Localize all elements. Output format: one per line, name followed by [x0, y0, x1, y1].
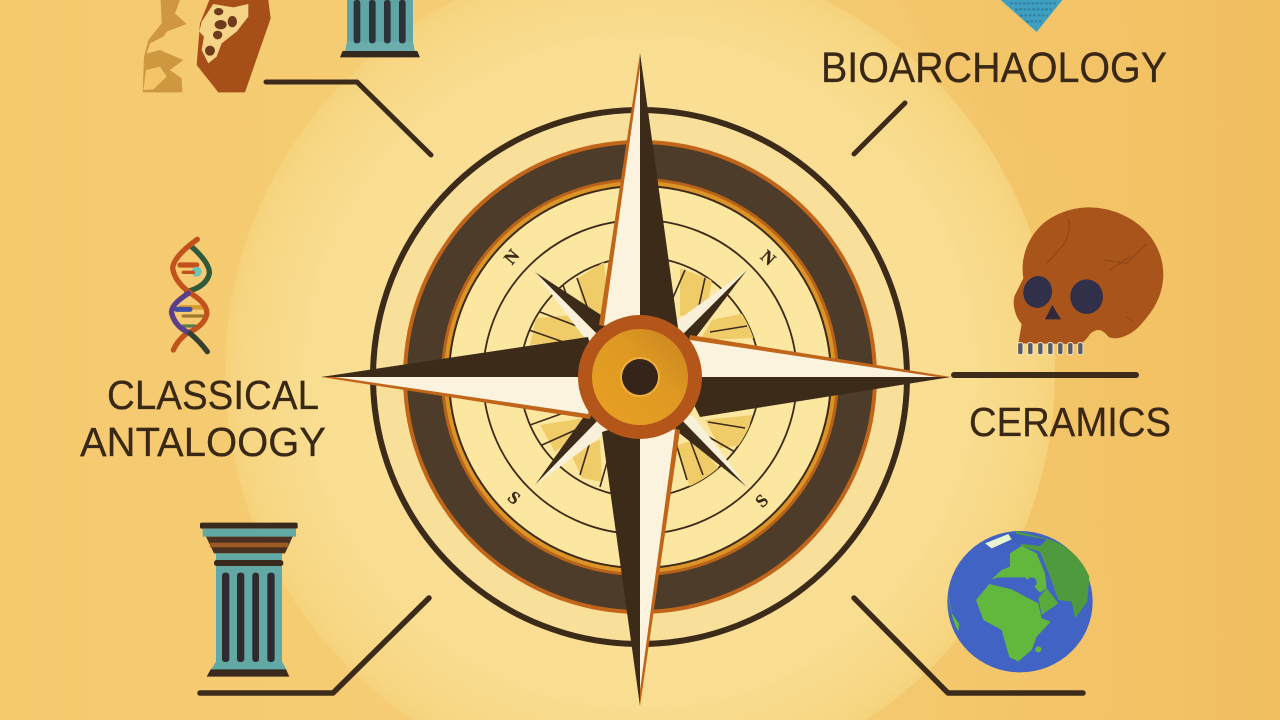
inner dial rings [483, 220, 797, 534]
icon: skull [1014, 207, 1163, 355]
east point [680, 335, 951, 417]
compass letters: N [757, 246, 780, 269]
icon: blue artifact [1001, 0, 1062, 32]
south point [602, 420, 680, 706]
compass hub [578, 315, 702, 439]
compass letters: S [751, 490, 772, 511]
icon: globe [947, 531, 1093, 672]
compass letters [500, 245, 780, 511]
outer compass ring [373, 110, 907, 644]
diagonal star points [535, 270, 747, 487]
dark compass band [403, 140, 877, 614]
rose spokes [529, 270, 747, 487]
icon: column bottom [200, 523, 298, 677]
compass [321, 53, 951, 706]
north point [599, 53, 678, 335]
compass letters: N [500, 245, 523, 268]
heading: classical antaloogy [80, 372, 326, 465]
heading: classical antaloogy: ANTALOOGY [80, 419, 326, 465]
icon: fossil rocks [143, 0, 271, 92]
compass letters: S [504, 487, 524, 508]
main star points [321, 53, 951, 706]
connector lines [200, 82, 1136, 693]
heading: bioarchaeology: BIOARCHAOLOGY [821, 44, 1167, 92]
rose wedges [530, 262, 756, 488]
heading: classical antaloogy: CLASSICAL [107, 372, 319, 418]
west point [321, 337, 600, 419]
icon: dna helix [172, 239, 209, 352]
heading: ceramics: CERAMICS [969, 399, 1171, 445]
icon: column top [340, 0, 420, 57]
